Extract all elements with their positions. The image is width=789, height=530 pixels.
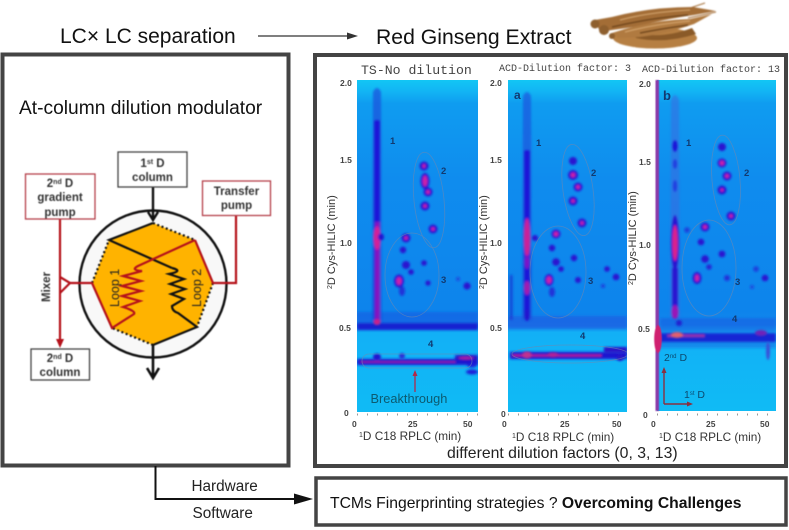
arrow: separation to extract <box>258 32 358 40</box>
axis tick labels: 0.5 <box>638 324 650 334</box>
axis tick labels: 50 <box>760 419 770 429</box>
axis tick labels: 0 <box>501 409 506 419</box>
label: Transfer pump: Transfer <box>214 186 260 198</box>
axis tick labels: 0 <box>643 410 648 420</box>
peak numbers: b <box>663 88 671 103</box>
peak numbers: 1 <box>390 136 396 147</box>
label: Transfer pump <box>202 181 270 216</box>
panel: chromatograms <box>315 55 786 466</box>
label: 2nd D gradient pump: pump <box>44 207 76 219</box>
chart: factor 13 2D plot <box>654 80 776 414</box>
x axis titles <box>359 429 761 444</box>
x axis titles: 1 <box>512 433 516 440</box>
axis tick labels: 1.5 <box>490 155 502 165</box>
chart: factor 3 2D plot <box>508 80 628 414</box>
axis key: 2nd D and 1st D: nd <box>670 354 677 360</box>
axis tick labels: 2.0 <box>639 79 651 89</box>
peak numbers <box>514 88 596 342</box>
arrow: panel to conclusion <box>156 466 313 504</box>
axis tick labels: 1.0 <box>639 240 651 250</box>
label: Software: Software <box>192 505 253 522</box>
axis tick labels: 25 <box>706 419 716 429</box>
axis key: 2nd D and 1st D: D <box>695 389 705 401</box>
peak numbers <box>663 88 749 325</box>
diagram: modulator valve <box>26 152 270 380</box>
y axis titles: 2 <box>628 281 635 285</box>
chart: no dilution 2D plot <box>357 80 478 414</box>
x axis titles: D C18 RPLC (min) <box>363 429 461 443</box>
peak numbers: 1 <box>536 138 542 149</box>
ticks <box>657 414 776 416</box>
plot title: factor 3: ACD-Dilution factor: 3 <box>499 63 631 75</box>
axis tick labels: 50 <box>612 419 622 429</box>
axis tick labels: 25 <box>408 419 418 429</box>
icon: red ginseng on plate <box>590 3 716 48</box>
label: 2nd D gradient pump: D <box>62 178 73 190</box>
axis tick labels: 1.0 <box>340 238 352 248</box>
peak numbers: 2 <box>744 168 749 179</box>
label: Transfer pump: pump <box>221 200 252 212</box>
peak numbers: 3 <box>588 276 593 287</box>
label: 2nd D gradient pump: 2 <box>47 178 53 190</box>
label: 2nd D gradient pump: gradient <box>37 192 83 204</box>
axis tick labels: 2.0 <box>490 78 502 88</box>
label: Loop 1: Loop 1 <box>108 269 122 307</box>
axis key: 2nd D and 1st D: st <box>690 391 695 397</box>
peak numbers <box>390 136 446 350</box>
label: 2nd D column: D <box>62 353 73 365</box>
axis tick labels: 50 <box>463 419 473 429</box>
left edge line of plot 3 <box>654 80 662 411</box>
axis tick labels: 0 <box>502 419 507 429</box>
axis tick labels: 2.0 <box>340 78 352 88</box>
y axis titles: D Cys-HILIC (min) <box>478 195 490 285</box>
box: conclusion <box>316 478 786 525</box>
ticks <box>357 414 478 416</box>
arrow: 1st D column in <box>148 187 158 220</box>
axis tick labels: 1.0 <box>490 238 502 248</box>
axis tick labels <box>339 78 770 429</box>
label: Hardware: Hardware <box>192 478 258 495</box>
annotation: breakthrough arrow <box>412 370 418 392</box>
label: 2nd D gradient pump <box>26 174 95 219</box>
peak numbers: a <box>514 88 521 102</box>
axis key: 2nd D and 1st D <box>662 352 705 406</box>
x axis titles: 1 <box>659 433 663 440</box>
axis tick labels: 0 <box>344 408 349 418</box>
axis tick labels: 0.5 <box>339 323 351 333</box>
label: Mixer: Mixer <box>41 271 53 302</box>
panel: at-column dilution modulator <box>2 54 288 466</box>
heading: Red Ginseng Extract: Red Ginseng Extract <box>376 26 572 49</box>
caption: dilution factors: different dilution factors (0, 3, 13) <box>447 445 678 462</box>
plot title: factor 13: ACD-Dilution factor: 13 <box>642 64 780 76</box>
label: 2nd D column: 2 <box>47 353 53 365</box>
axis key: 2nd D and 1st D: 1 <box>684 389 690 401</box>
plot title: no dilution: TS-No dilution <box>361 63 472 78</box>
axis key: 2nd D and 1st D: 2 <box>664 352 670 364</box>
panel heading: At-column dilution modulator <box>19 98 263 119</box>
peak numbers: 3 <box>735 277 740 288</box>
label: 2nd D column: nd <box>53 354 62 361</box>
x axis titles: D C18 RPLC (min) <box>516 430 614 444</box>
axis tick labels: 0 <box>651 419 656 429</box>
label: Loop 2: Loop 2 <box>190 269 204 307</box>
peak numbers: 4 <box>428 339 434 350</box>
label: 1st D column: 1 <box>140 158 147 170</box>
axis tick labels: 1.5 <box>340 155 352 165</box>
arrow: outlet <box>147 345 159 378</box>
label: 2nd D gradient pump: nd <box>53 179 62 186</box>
peak numbers: 4 <box>732 314 738 325</box>
label: 2nd D column <box>31 349 90 380</box>
axis tick labels: 1.5 <box>639 157 651 167</box>
box: conclusion: TCMs Fingerprinting strategies ? Overcoming Challenges <box>330 495 742 512</box>
peak numbers: 2 <box>441 166 446 177</box>
label: 1st D column: D <box>153 158 165 170</box>
label: 1st D column: st <box>147 159 154 166</box>
axis key: 2nd D and 1st D: D <box>677 352 687 364</box>
x axis titles: 1 <box>359 432 363 439</box>
peak numbers: 2 <box>591 168 596 179</box>
axis tick labels: 25 <box>560 419 570 429</box>
y axis titles: D Cys-HILIC (min) <box>627 191 639 281</box>
y axis titles: 2 <box>479 285 486 289</box>
x axis titles: D C18 RPLC (min) <box>663 430 761 444</box>
y axis titles: D Cys-HILIC (min) <box>326 195 338 285</box>
peak numbers: 1 <box>686 138 692 149</box>
axis tick labels: 0.5 <box>490 323 502 333</box>
label: 2nd D column: column <box>40 367 80 379</box>
heading: LC×LC separation: LC× LC separation <box>60 25 236 48</box>
annotation: breakthrough label: Breakthrough <box>370 391 447 406</box>
y axis titles: 2 <box>327 285 334 289</box>
peak numbers: 3 <box>441 275 446 286</box>
y axis titles <box>326 191 639 289</box>
ticks <box>508 414 627 416</box>
label: 1st D column <box>118 152 187 187</box>
label: 1st D column: column <box>132 172 173 184</box>
peak numbers: 4 <box>580 331 586 342</box>
axis tick labels: 0 <box>352 419 357 429</box>
